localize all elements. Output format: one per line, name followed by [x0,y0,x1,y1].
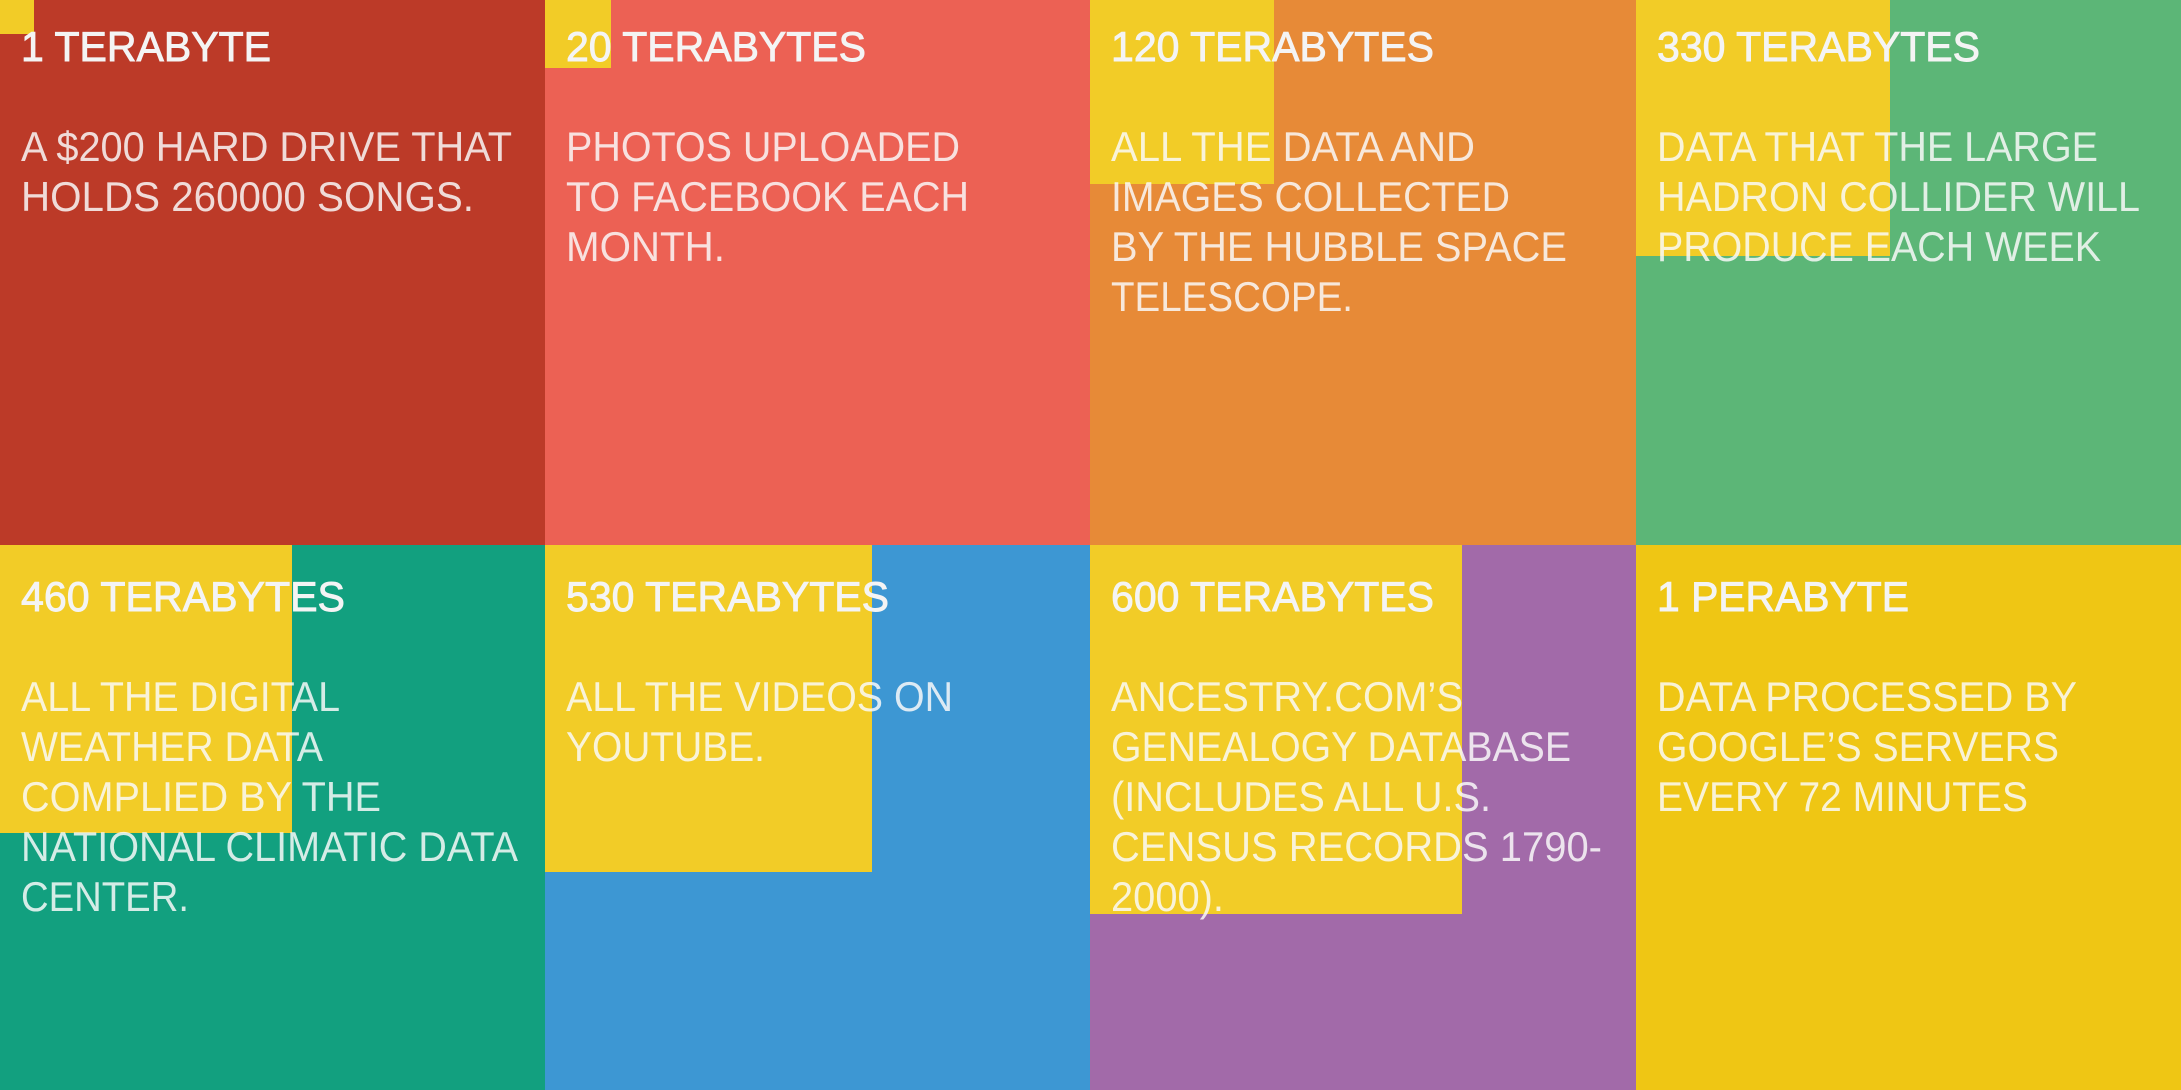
panel: 1 terabyte [0,0,545,545]
text block: youtube videos [566,673,953,770]
scale square: 530 terabytes [545,545,872,872]
text block: hard drive: HOLDS 260000 SONGS. [21,173,474,220]
text block: google servers: EVERY 72 MINUTES [1657,773,2028,820]
text block: hubble telescope [1111,123,1567,320]
heading: 1 terabyte: 1 TERABYTE [21,23,271,70]
text block: hard drive: A $200 HARD DRIVE THAT [21,123,512,170]
text block: ancestry database: GENEALOGY DATABASE [1111,723,1571,770]
text block: weather data: COMPLIED BY THE [21,773,381,820]
text block: ancestry database: CENSUS RECORDS 1790- [1111,823,1602,870]
text block: large hadron collider: HADRON COLLIDER WILL [1657,173,2140,220]
text block: google servers: GOOGLE’S SERVERS [1657,723,2059,770]
text block: ancestry database: (INCLUDES ALL U.S. [1111,773,1491,820]
scale square: 460 terabytes [0,545,292,833]
heading: 20 terabytes: 20 TERABYTES [566,23,866,70]
text block: large hadron collider [1657,123,2140,270]
panel: 460 terabytes [0,545,545,1090]
scale square: 120 terabytes [1090,0,1274,184]
text block: facebook photos: TO FACEBOOK EACH [566,173,969,220]
panel: 20 terabytes [545,0,1090,545]
panel: 530 terabytes [545,545,1090,1090]
heading: 120 terabytes: 120 TERABYTES [1111,23,1434,70]
panel: 330 terabytes [1636,0,2181,545]
heading: 330 terabytes: 330 TERABYTES [1657,23,1980,70]
text block: ancestry database: ANCESTRY.COM’S [1111,673,1463,720]
text block: hubble telescope: ALL THE DATA AND [1111,123,1475,170]
scale square: 1 terabyte [0,0,34,34]
text block: ancestry database: 2000). [1111,873,1224,920]
text block: weather data: CENTER. [21,873,189,920]
text block: weather data: WEATHER DATA [21,723,323,770]
text block: youtube videos: ALL THE VIDEOS ON [566,673,953,720]
text block: weather data: ALL THE DIGITAL [21,673,340,720]
text block: facebook photos [566,123,969,270]
text block: facebook photos: PHOTOS UPLOADED [566,123,960,170]
scale square: 600 terabytes [1090,545,1462,914]
text block: weather data [21,673,518,920]
panel: 120 terabytes [1090,0,1636,545]
text block: facebook photos: MONTH. [566,223,725,270]
text block: hubble telescope: IMAGES COLLECTED [1111,173,1510,220]
panel: 1 petabyte [1636,545,2181,1090]
text block: hubble telescope: TELESCOPE. [1111,273,1353,320]
scale square: 330 terabytes [1636,0,1890,256]
heading: 530 terabytes: 530 TERABYTES [566,573,889,620]
text block: google servers: DATA PROCESSED BY [1657,673,2077,720]
scale square: 20 terabytes [545,0,611,68]
text block: hard drive [21,123,512,220]
text block: youtube videos: YOUTUBE. [566,723,765,770]
heading: 460 terabytes: 460 TERABYTES [21,573,345,620]
text block: large hadron collider: DATA THAT THE LARGE [1657,123,2098,170]
text block: hubble telescope: BY THE HUBBLE SPACE [1111,223,1567,270]
heading: 1 perabyte: 1 PERABYTE [1657,573,1909,620]
text block: large hadron collider: PRODUCE EACH WEEK [1657,223,2101,270]
panel: 600 terabytes [1090,545,1636,1090]
text block: google servers [1657,673,2077,820]
text block: weather data: NATIONAL CLIMATIC DATA [21,823,518,870]
text block: ancestry database [1111,673,1602,920]
heading: 600 terabytes: 600 TERABYTES [1111,573,1434,620]
